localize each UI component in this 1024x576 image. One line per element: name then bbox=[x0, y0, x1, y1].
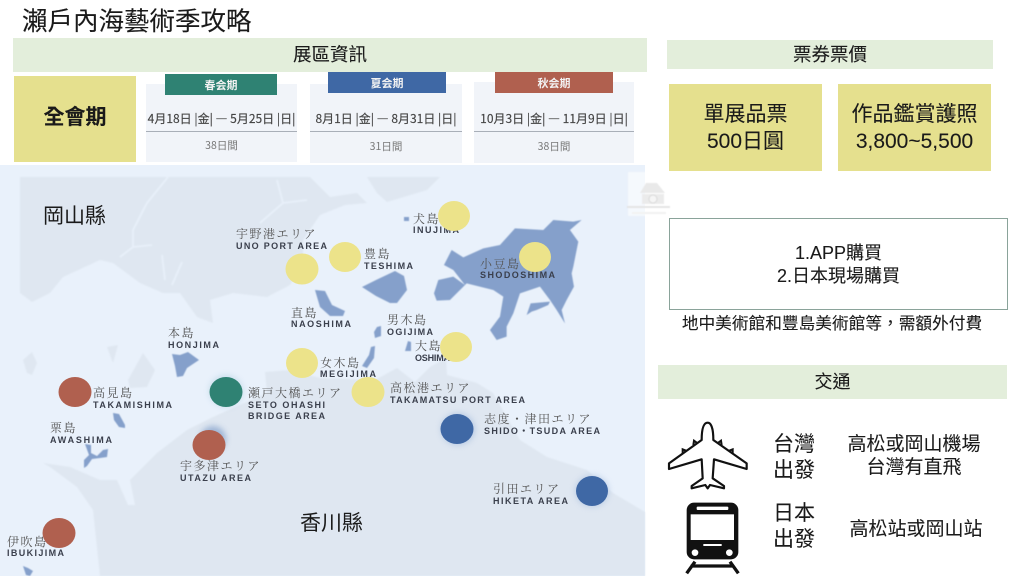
note: extra charges: 地中美術館和豐島美術館等，需額外付費 bbox=[682, 314, 982, 333]
islands bbox=[23, 217, 582, 576]
panel: full period: 全會期 bbox=[44, 106, 106, 129]
island: Honjima bbox=[172, 352, 199, 377]
label: Ogijima bbox=[387, 311, 434, 337]
label: Hiketa bbox=[493, 480, 568, 506]
label: departing from Japan bbox=[773, 502, 815, 551]
label: departing from Taiwan bbox=[773, 433, 815, 482]
label: Teshima bbox=[364, 245, 414, 271]
label: Seto Ohashi Bridge: SETO OHASHI bbox=[248, 400, 325, 410]
label: Shodoshima: SHODOSHIMA bbox=[480, 270, 556, 280]
panel: purchase methods bbox=[669, 218, 1008, 310]
heading: transport: 交通 bbox=[814, 372, 850, 392]
label: Awashima: AWASHIMA bbox=[50, 435, 112, 445]
label: Uno Port: 宇野港エリア bbox=[236, 225, 317, 242]
panel: autumn period bbox=[474, 82, 634, 163]
label: Takamatsu Port bbox=[390, 379, 526, 405]
label: Megijima: 女木島 bbox=[320, 354, 361, 371]
markers: spring green bbox=[209, 375, 243, 407]
label: Takamatsu Port: TAKAMATSU PORT AREA bbox=[390, 395, 526, 405]
label: Okayama prefecture: 岡山縣 bbox=[43, 205, 106, 228]
heading: exhibition info bbox=[13, 38, 647, 72]
heading: transport bbox=[658, 365, 1007, 399]
heading: exhibition info: 展區資訊 bbox=[293, 44, 367, 65]
panel: single ticket bbox=[669, 84, 822, 171]
island: Takamishima area islet bbox=[113, 413, 125, 428]
label: Shido Tsuda: 志度・津田エリア bbox=[484, 410, 592, 427]
label: departing from Japan: 日本 bbox=[773, 502, 815, 525]
tag: spring: 春会期 bbox=[204, 80, 238, 92]
markers: blue bbox=[440, 413, 609, 507]
watermark bbox=[627, 172, 672, 216]
summer period days: 31日間 bbox=[370, 139, 402, 154]
island: Naoshima bbox=[315, 290, 345, 316]
label: Takamishima bbox=[93, 384, 172, 410]
label: Shodoshima: 小豆島 bbox=[480, 255, 521, 272]
label: Seto Ohashi Bridge: BRIDGE AREA bbox=[248, 411, 326, 421]
label: Naoshima bbox=[291, 304, 352, 329]
label: Shido Tsuda bbox=[484, 410, 600, 436]
label: Megijima: MEGIJIMA bbox=[320, 369, 376, 379]
icon: train bbox=[685, 502, 740, 574]
label: departing from Japan: 出發 bbox=[773, 528, 815, 551]
label: Oshima bbox=[415, 337, 450, 363]
autumn period date: 10月3日 |金| ― 11月9日 |日| bbox=[480, 110, 628, 127]
label: Hiketa: 引田エリア bbox=[493, 480, 561, 497]
label: Inujima bbox=[413, 210, 460, 235]
label: Naoshima: NAOSHIMA bbox=[291, 319, 352, 329]
tag: summer bbox=[328, 72, 446, 93]
spring period date: 4月18日 |金| ― 5月25日 |日| bbox=[148, 110, 295, 127]
label: Kagawa prefecture: 香川縣 bbox=[300, 512, 363, 535]
island: Inujima bbox=[404, 217, 409, 221]
panel: summer period bbox=[310, 84, 462, 163]
panel: purchase methods: 2.日本現場購買 bbox=[777, 266, 900, 286]
title: 瀨戶內海藝術季攻略 bbox=[22, 8, 252, 36]
label: Inujima: INUJIMA bbox=[413, 225, 460, 235]
label: Takamatsu Port: 高松港エリア bbox=[390, 379, 471, 396]
heading: tickets bbox=[667, 40, 993, 69]
label: Shido Tsuda: SHIDO・TSUDA AREA bbox=[484, 426, 600, 436]
land: Okayama bbox=[20, 177, 440, 323]
island: Ogijima bbox=[374, 326, 381, 338]
label: Teshima: 豊島 bbox=[364, 245, 391, 262]
label: Ibukijima: IBUKIJIMA bbox=[7, 548, 64, 558]
tag: autumn bbox=[495, 72, 613, 93]
summer period date: 8月1日 |金| ― 8月31日 |日| bbox=[315, 110, 456, 127]
label: Honjima: 本島 bbox=[168, 324, 195, 341]
tag: spring bbox=[165, 74, 277, 95]
land: Kagawa bbox=[43, 358, 645, 576]
label: Uno Port: UNO PORT AREA bbox=[236, 241, 328, 251]
markers: autumn red bbox=[42, 377, 226, 548]
panel: single ticket: 單展品票 bbox=[704, 102, 788, 126]
label: Ibukijima: 伊吹島 bbox=[7, 533, 48, 550]
island: Ibukijima bbox=[23, 566, 33, 576]
label: Shodoshima bbox=[480, 255, 556, 280]
text: Taiwan route: 台灣有直飛 bbox=[866, 457, 962, 478]
tag: autumn: 秋会期 bbox=[538, 78, 570, 90]
island: Megijima bbox=[362, 346, 375, 368]
heading: tickets: 票券票價 bbox=[793, 44, 867, 65]
label: Inujima: 犬島 bbox=[413, 210, 440, 227]
small land patches bbox=[23, 345, 155, 388]
label: Utazu bbox=[180, 457, 261, 483]
icon: airplane bbox=[668, 422, 748, 490]
label: Awashima: 栗島 bbox=[50, 419, 77, 436]
label: Honjima bbox=[168, 324, 220, 350]
label: Oshima: 大島 bbox=[415, 337, 442, 354]
label: Utazu: 宇多津エリア bbox=[180, 457, 261, 474]
island: Awashima bbox=[84, 444, 108, 468]
tag: summer: 夏会期 bbox=[370, 78, 404, 90]
panel: passport bbox=[838, 84, 991, 171]
label: Awashima bbox=[50, 419, 112, 445]
label: departing from Taiwan: 出發 bbox=[773, 459, 815, 482]
label: Seto Ohashi Bridge bbox=[248, 384, 343, 421]
label: Uno Port bbox=[236, 225, 328, 251]
label: Ogijima: OGIJIMA bbox=[387, 327, 434, 337]
autumn period days: 38日間 bbox=[538, 139, 570, 154]
label: Takamishima: 高見島 bbox=[93, 384, 134, 401]
label: Ogijima: 男木島 bbox=[387, 311, 428, 328]
label: Teshima: TESHIMA bbox=[364, 261, 414, 271]
panel: purchase methods: 1.APP購買 bbox=[795, 243, 882, 263]
island: Shodoshima bbox=[434, 220, 582, 340]
text: Taiwan route bbox=[847, 434, 980, 478]
island: Teshima bbox=[362, 271, 407, 303]
label: Oshima: OSHIMA bbox=[415, 353, 450, 363]
label: Honjima: HONJIMA bbox=[168, 340, 220, 350]
panel: full period bbox=[14, 76, 136, 162]
label: Takamishima: TAKAMISHIMA bbox=[93, 400, 172, 410]
panel: passport: 作品鑑賞護照 bbox=[852, 102, 978, 126]
label: Megijima bbox=[320, 354, 376, 379]
text: Japan route: 高松站或岡山站 bbox=[849, 518, 982, 540]
label: Seto Ohashi Bridge: 瀬戸大橋エリア bbox=[248, 384, 343, 401]
markers: summer yellow bbox=[286, 201, 551, 407]
label: Ibukijima bbox=[7, 533, 64, 558]
label: Hiketa: HIKETA AREA bbox=[493, 496, 568, 506]
panel: single ticket: 500日圓 bbox=[707, 130, 784, 152]
label: Utazu: UTAZU AREA bbox=[180, 473, 252, 483]
text: Taiwan route: 高松或岡山機場 bbox=[847, 434, 980, 455]
island: Oshima bbox=[405, 341, 411, 351]
panel: passport: 3,800~5,500 bbox=[856, 130, 973, 152]
label: departing from Taiwan: 台灣 bbox=[773, 433, 815, 456]
panel: spring period bbox=[146, 84, 297, 162]
label: Naoshima: 直島 bbox=[291, 304, 318, 321]
spring period days: 38日間 bbox=[205, 138, 238, 153]
